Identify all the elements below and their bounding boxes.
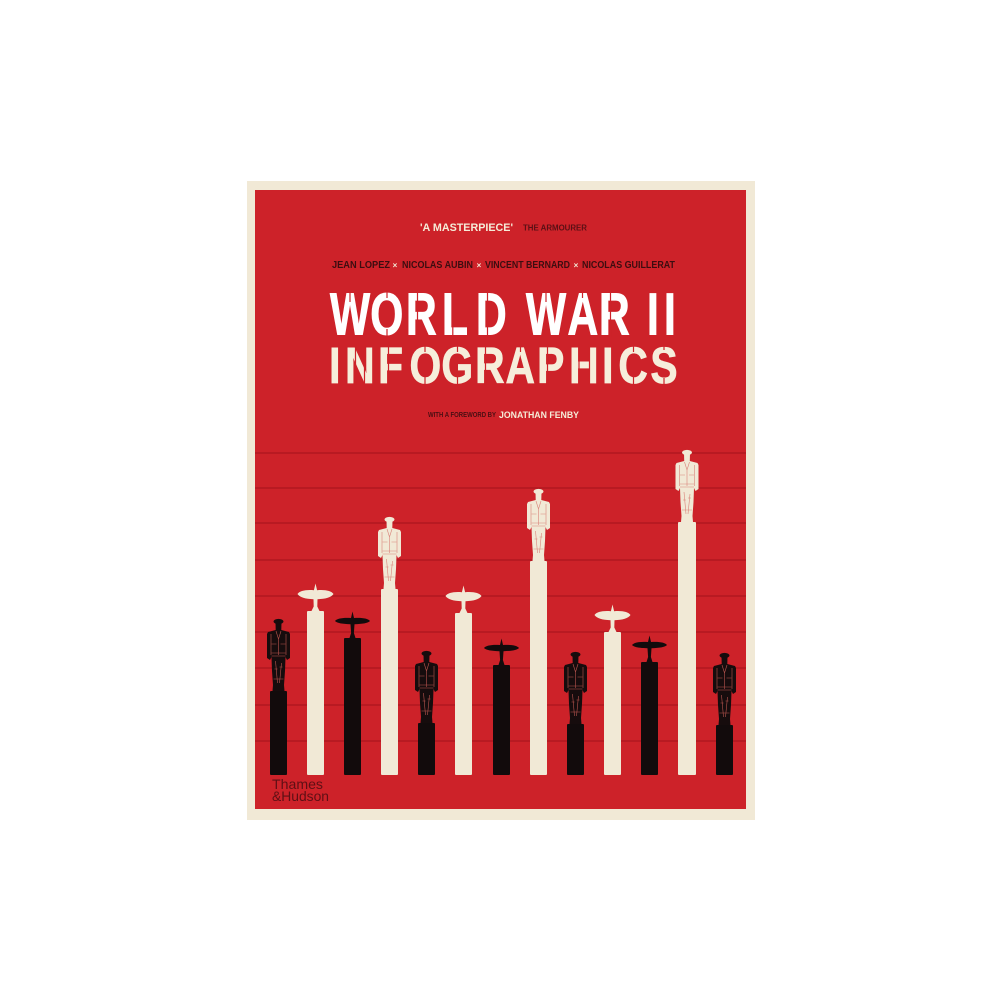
- authors line: JEAN LOPEZ: [332, 259, 391, 271]
- authors line: NICOLAS GUILLERAT: [582, 259, 675, 271]
- cover cream border: [247, 181, 755, 820]
- column 1: black soldier: [267, 619, 290, 775]
- column 8: cream soldier: [527, 489, 550, 775]
- column 5: black soldier: [415, 651, 438, 775]
- quote line: THE ARMOURER: [523, 224, 587, 232]
- chart grid lines: [255, 453, 746, 741]
- column 9: black soldier: [564, 652, 587, 775]
- authors line: ×: [574, 261, 579, 270]
- authors line: ×: [393, 261, 398, 270]
- column 13: black soldier: [713, 653, 736, 775]
- publisher logo: &Hudson: [272, 788, 329, 804]
- stencil cuts line one: [350, 290, 610, 337]
- column 4: cream soldier: [378, 517, 401, 775]
- quote line: [420, 222, 587, 234]
- column 3: black plane: [335, 612, 370, 775]
- stencil cuts line two: [356, 344, 664, 385]
- quote line: 'A MASTERPIECE': [420, 222, 513, 234]
- authors line: NICOLAS AUBIN: [402, 259, 473, 271]
- authors line: VINCENT BERNARD: [485, 259, 570, 271]
- bar chart: pictogram columns: [267, 450, 736, 775]
- column 6: cream plane: [446, 586, 482, 775]
- red cover panel: [255, 190, 746, 809]
- publisher logo: Thames: [272, 776, 323, 792]
- publisher logo: [272, 776, 329, 804]
- foreword line: WITH A FOREWORD BY: [428, 412, 496, 419]
- title: Infographics: INFOGRAPHICS: [329, 337, 678, 394]
- column 12: cream soldier: [676, 450, 698, 775]
- foreword line: [428, 410, 580, 421]
- foreword line: JONATHAN FENBY: [499, 410, 580, 421]
- column 11: black plane: [632, 636, 667, 775]
- authors line: ×: [477, 261, 482, 270]
- column 7: black plane: [484, 638, 519, 775]
- column 2: cream plane: [298, 584, 334, 775]
- authors line: [332, 259, 675, 271]
- column 10: cream plane: [594, 604, 630, 775]
- title: World War II: WORLD WAR II: [330, 281, 676, 347]
